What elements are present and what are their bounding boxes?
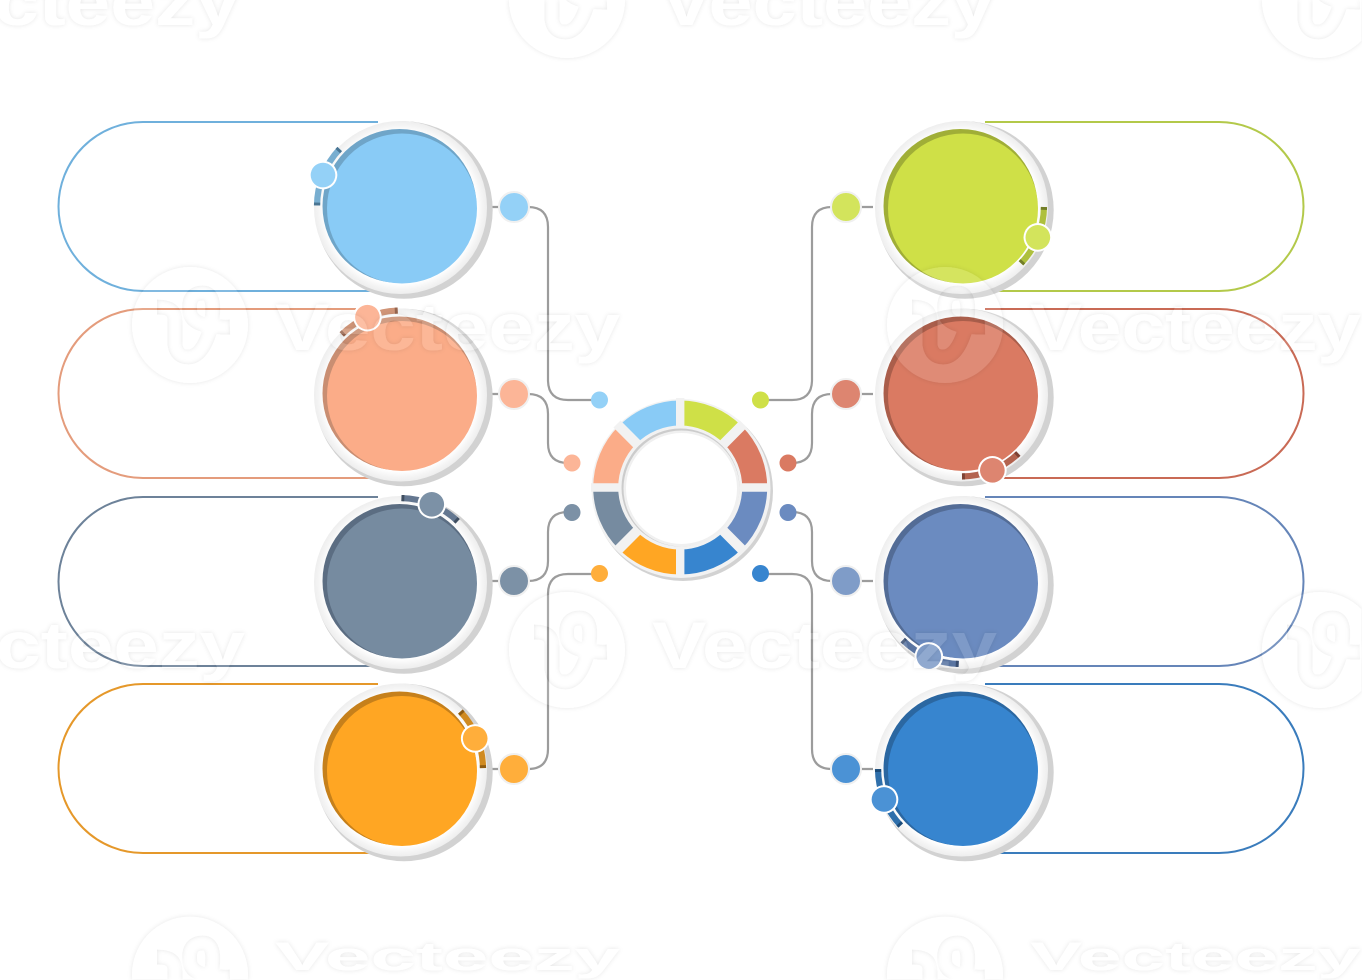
watermark: Vecteezy [275, 935, 622, 979]
center donut [591, 398, 773, 581]
marker with ticks [452, 705, 499, 772]
marker with ticks [399, 480, 465, 528]
watermark: Vecteezy [1030, 290, 1361, 364]
connector lines [487, 207, 873, 769]
donut segments [593, 400, 767, 574]
marker with ticks [299, 142, 347, 208]
marker with ticks [1014, 204, 1062, 271]
watermark: Vecteezy [652, 608, 997, 682]
panel: right row 1 circle [875, 121, 1062, 299]
panel: right row 4 circle [860, 684, 1054, 861]
panel: left row 3 circle [314, 480, 493, 674]
panel: right row 2 circle [875, 308, 1054, 494]
panel: left row 1 circle [299, 121, 493, 299]
marker with ticks [959, 447, 1026, 494]
watermark: Vecteezy [1030, 935, 1362, 979]
center dots [564, 392, 796, 582]
panel: right row 3 circle [875, 496, 1054, 681]
marker with ticks [334, 293, 401, 341]
panel: left row 2 circle [314, 293, 493, 486]
connector nodes [499, 192, 861, 784]
panel: left row 4 circle [314, 684, 499, 861]
marker with ticks [860, 766, 908, 833]
watermark: Vecteezy [275, 290, 620, 364]
pill outlines [58, 122, 1304, 853]
marker with ticks [896, 632, 962, 681]
